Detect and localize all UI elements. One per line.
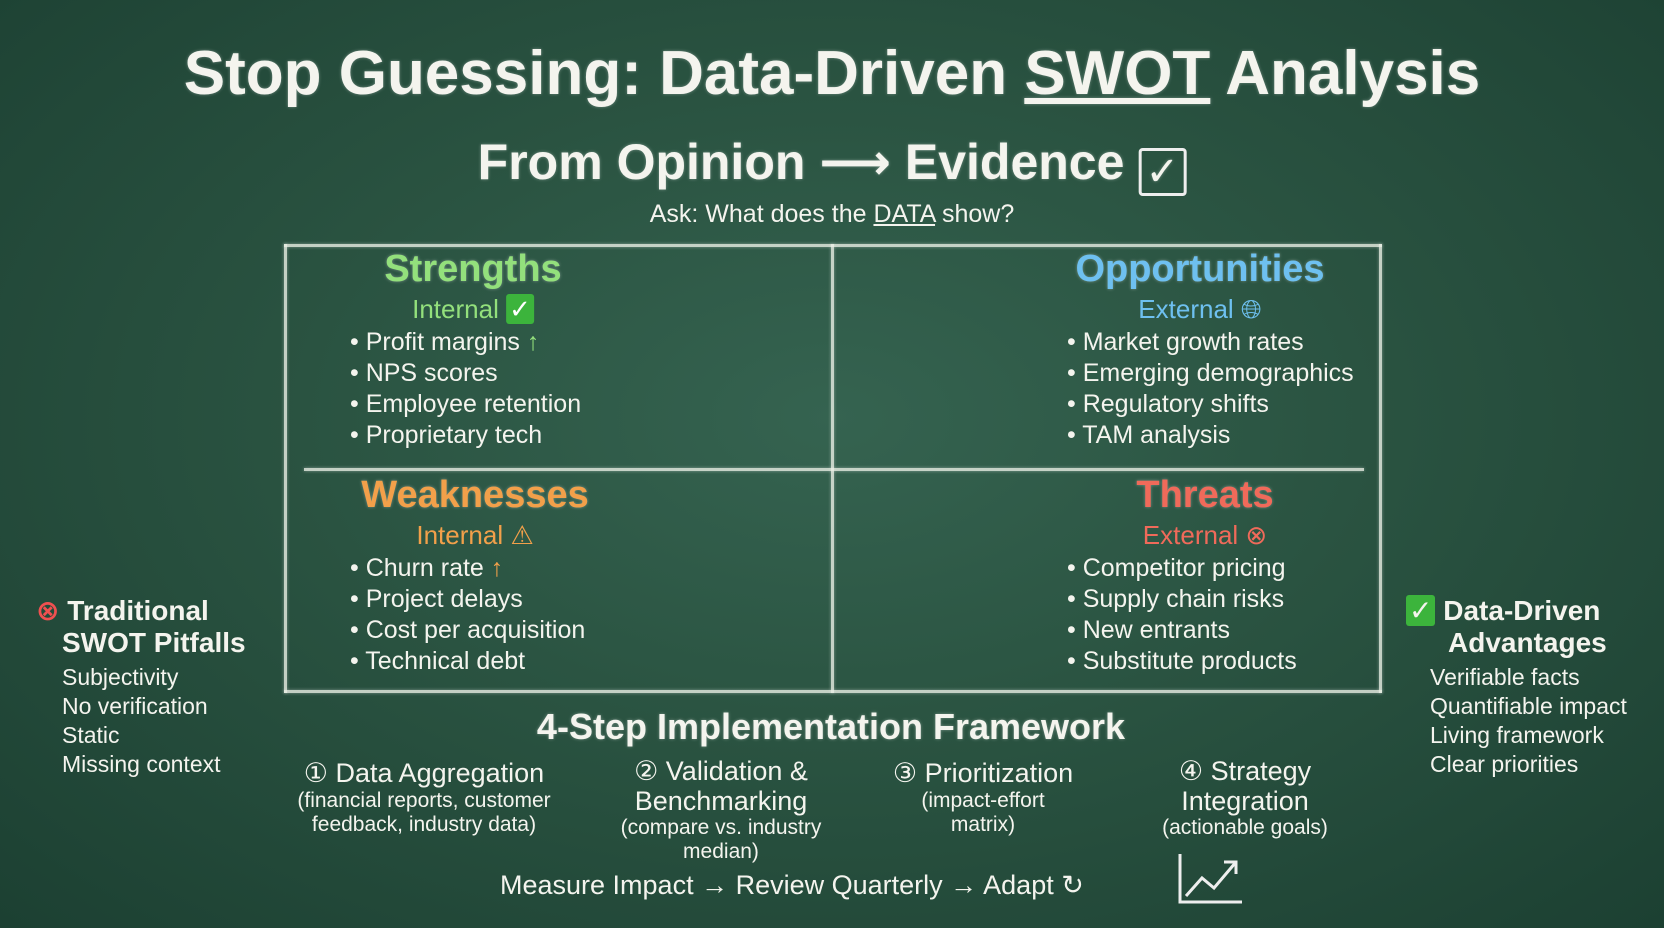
- quadrant: threats: Supply chain risks: [1083, 585, 1284, 613]
- panel: advantages: Verifiable facts: [1430, 664, 1580, 690]
- step 3: ③ Prioritization: [893, 758, 1073, 788]
- step 2: Benchmarking: [635, 786, 807, 816]
- quadrant: weaknesses: [351, 474, 589, 675]
- panel: advantages: Clear priorities: [1430, 751, 1578, 777]
- quadrant: strengths: NPS scores: [366, 359, 498, 387]
- step 1: feedback, industry data): [312, 813, 536, 836]
- step 4: (actionable goals): [1162, 816, 1328, 839]
- quadrant: weaknesses: Cost per acquisition: [366, 616, 585, 644]
- panel: advantages: Quantifiable impact: [1430, 693, 1627, 719]
- quadrant: opportunities: TAM analysis: [1082, 421, 1230, 449]
- panel: pitfalls: Static: [62, 722, 120, 748]
- panel: pitfalls: Subjectivity: [62, 664, 178, 690]
- quadrant: opportunities: Emerging demographics: [1083, 359, 1354, 387]
- quadrant: opportunities: External 🌐︎: [1138, 294, 1262, 324]
- step 2: median): [683, 840, 759, 863]
- framework heading: 4-Step Implementation Framework: [537, 706, 1125, 747]
- step 4: Integration: [1181, 786, 1309, 816]
- quadrant: strengths: [351, 248, 581, 449]
- quadrant: strengths: Internal ✓: [412, 294, 531, 324]
- step 3: (impact-effort: [921, 789, 1045, 812]
- quadrant: strengths: Employee retention: [366, 390, 581, 418]
- panel: pitfalls: SWOT Pitfalls: [62, 627, 246, 658]
- panel: advantages: [1406, 595, 1627, 777]
- panel: pitfalls: Missing context: [62, 751, 221, 777]
- step 4: [1162, 756, 1328, 839]
- step 4: ④ Strategy: [1179, 756, 1311, 786]
- quadrant: threats: [1068, 474, 1297, 675]
- step 3: matrix): [951, 813, 1015, 836]
- step 3: [893, 758, 1073, 836]
- panel: advantages: ✓ Data-Driven: [1409, 595, 1600, 626]
- step 2: ② Validation &: [634, 756, 808, 786]
- step 2: [621, 756, 822, 863]
- quadrant: threats: External ⊗: [1143, 520, 1267, 550]
- quadrant: weaknesses: Project delays: [366, 585, 523, 613]
- quadrant: weaknesses: Internal ⚠: [416, 520, 534, 550]
- quadrant: strengths: Proprietary tech: [366, 421, 542, 449]
- panel: advantages: Advantages: [1448, 627, 1607, 658]
- panel: pitfalls: [36, 595, 246, 777]
- quadrant: threats: Threats: [1136, 474, 1274, 516]
- subtitle: From Opinion ⟶ Evidence: [478, 134, 1124, 190]
- quadrant: opportunities: Market growth rates: [1083, 328, 1304, 356]
- step 1: [297, 758, 551, 836]
- quadrant: threats: Competitor pricing: [1083, 554, 1286, 582]
- quadrant: weaknesses: Weaknesses: [361, 474, 589, 516]
- subtitle: ✓: [1146, 150, 1179, 194]
- step 1: (financial reports, customer: [297, 789, 551, 812]
- quadrant: threats: New entrants: [1083, 616, 1230, 644]
- panel: pitfalls: No verification: [62, 693, 208, 719]
- quadrant: opportunities: [1068, 248, 1354, 449]
- quadrant: weaknesses: Churn rate ↑: [366, 554, 503, 582]
- quadrant: weaknesses: Technical debt: [365, 647, 525, 675]
- SWOT grid: [282, 242, 1384, 696]
- quadrant: strengths: Strengths: [384, 248, 562, 290]
- step 2: (compare vs. industry: [621, 816, 821, 839]
- step 1: ① Data Aggregation: [304, 758, 544, 788]
- title: Stop Guessing: Data-Driven SWOT Analysis: [184, 39, 1480, 108]
- quadrant: threats: Substitute products: [1083, 647, 1297, 675]
- prompt: Ask: What does the DATA show?: [650, 200, 1014, 228]
- panel: advantages: Living framework: [1430, 722, 1604, 748]
- icon: growth chart: [1178, 854, 1242, 904]
- quadrant: opportunities: Regulatory shifts: [1083, 390, 1269, 418]
- quadrant: opportunities: Opportunities: [1075, 248, 1325, 290]
- cycle line: Measure Impact → Review Quarterly → Adapt ↻: [500, 870, 1084, 900]
- quadrant: strengths: Profit margins ↑: [366, 328, 539, 356]
- panel: pitfalls: ⊗ Traditional: [36, 595, 209, 626]
